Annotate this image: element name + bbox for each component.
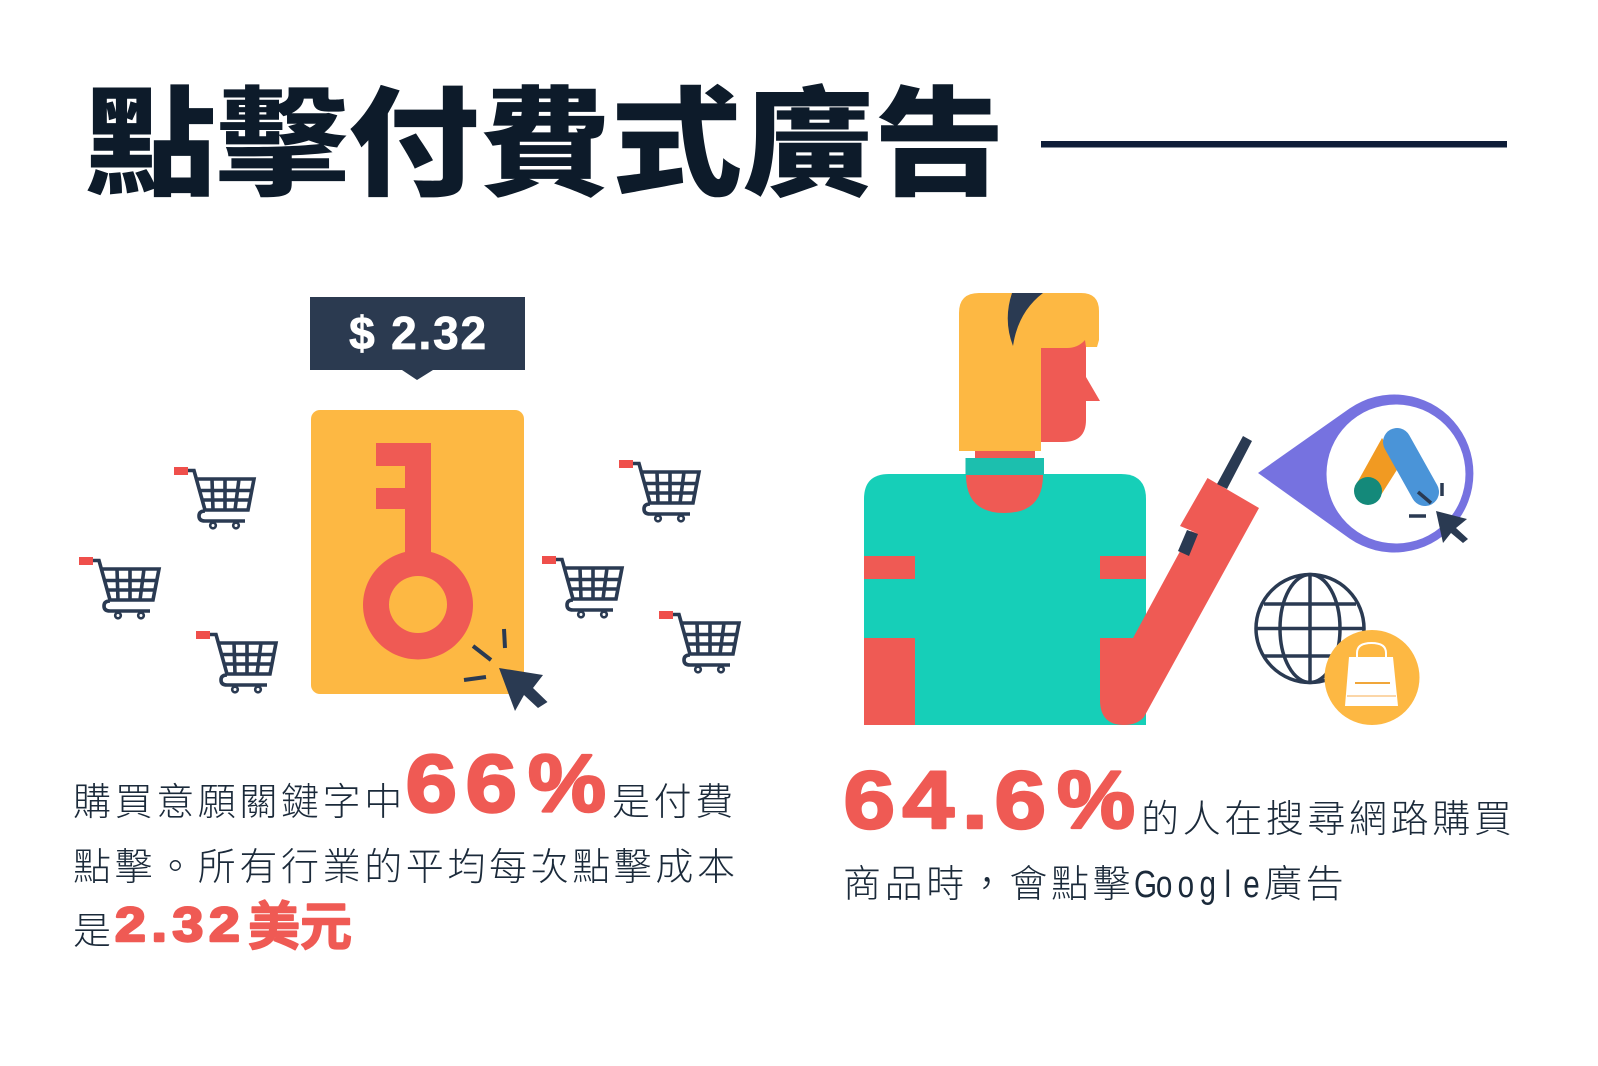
text block: right statistic — [843, 754, 1515, 906]
torso — [864, 474, 1146, 725]
yellow card — [311, 410, 524, 694]
text block: left statistic — [73, 737, 739, 960]
line 1 tail: 的人在搜尋網路購買 — [1141, 799, 1515, 841]
icon: shopping bag badge — [1324, 630, 1420, 725]
icon: shopping cart — [542, 556, 622, 617]
icon: shopping cart — [659, 611, 739, 672]
line 3 lead: 是 — [73, 911, 115, 953]
face — [1041, 340, 1100, 442]
icon: map pin with ads logo — [1258, 394, 1473, 552]
panel: person searching illustration — [864, 293, 1473, 725]
neckline — [966, 475, 1043, 513]
icon: shopping cart — [196, 631, 276, 692]
raised arm with phone — [1100, 478, 1259, 725]
stat: 64.6%: % — [1057, 754, 1135, 845]
panel: cost per click illustration — [79, 297, 739, 711]
stat: 64.6%: 64.6 — [844, 754, 1046, 846]
stat: 66% — [405, 737, 606, 829]
phone details — [1178, 436, 1252, 556]
price tag — [310, 297, 525, 380]
hair — [959, 293, 1099, 451]
line 1 lead: 購買意願關鍵字中 — [73, 782, 406, 824]
title: 點擊付費式廣告 — [85, 79, 1005, 212]
line 1 tail: 是付費 — [612, 782, 737, 824]
person — [864, 293, 1259, 725]
icon: shopping cart — [619, 460, 699, 521]
stat: 2.32: 2.32 — [115, 897, 245, 951]
hair shadow — [1008, 293, 1043, 346]
stat: 66%: % — [528, 737, 606, 829]
icon: globe — [1256, 574, 1364, 682]
icon: click cursor — [464, 629, 548, 711]
neck — [975, 445, 1035, 460]
stat: 66%: 66 — [405, 737, 517, 829]
line 2 tail: 廣告 — [1264, 864, 1347, 906]
title rule — [1041, 141, 1507, 148]
icon: shopping cart — [79, 557, 159, 618]
collar — [966, 458, 1044, 475]
word: Google: Google — [1134, 864, 1260, 906]
stat: 64.6% — [844, 754, 1135, 846]
price tag: $ 2.32 — [349, 307, 488, 359]
sleeve stripes — [864, 556, 1146, 725]
line 2 lead: 商品時，會點擊 — [843, 864, 1134, 906]
line 2: 點擊。所有行業的平均每次點擊成本 — [73, 847, 739, 889]
icon: key — [363, 443, 473, 659]
icon: shopping cart — [174, 467, 254, 528]
stat unit: 美元 — [248, 885, 352, 960]
